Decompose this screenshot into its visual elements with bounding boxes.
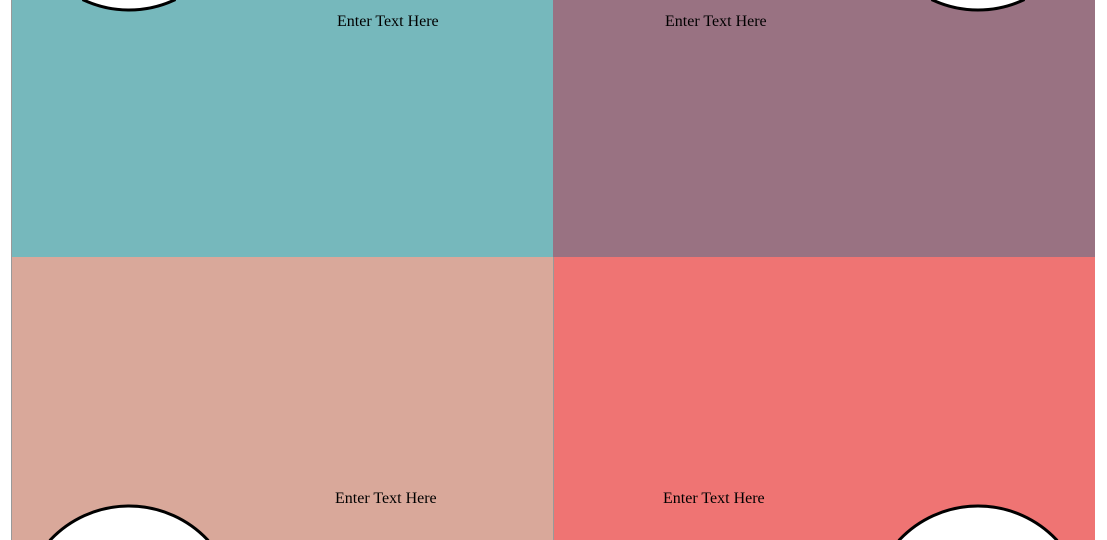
circle: bottom-right: [899, 506, 1057, 540]
circle: top-left: [84, 0, 174, 10]
text: top-left: Enter Text Here: [337, 13, 439, 30]
circle: bottom-left: [50, 506, 208, 540]
text: bottom-left: Enter Text Here: [335, 490, 437, 507]
panel: top-right mauve: [553, 0, 1095, 257]
circle: top-right: [933, 0, 1023, 10]
text: bottom-right: Enter Text Here: [663, 490, 765, 507]
panel: bottom-right red: [553, 257, 1095, 540]
panel: top-left teal: [11, 0, 553, 257]
panel: bottom-left pink: [11, 257, 553, 540]
text: top-right: Enter Text Here: [665, 13, 767, 30]
